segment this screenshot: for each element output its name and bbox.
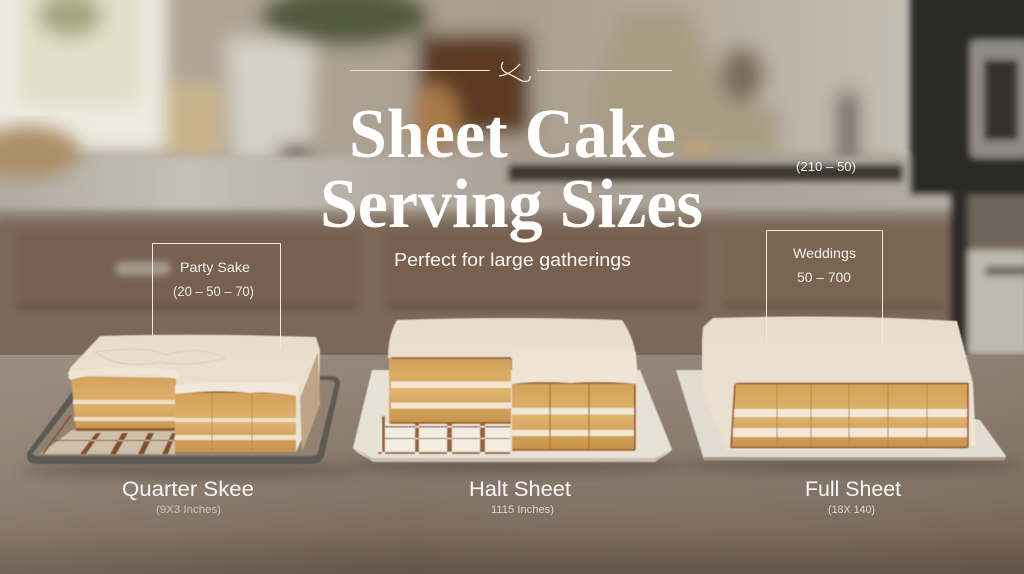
label: full sheet: (18X 140) (828, 504, 875, 516)
grid sheet (380, 423, 510, 454)
crust (731, 383, 968, 448)
label: half sheet: Halt Sheet (469, 478, 571, 501)
frosting swirl (95, 349, 225, 364)
callout: weddings text: Weddings (793, 245, 856, 261)
top ornament (350, 62, 672, 81)
grooves (777, 383, 927, 448)
board (353, 370, 672, 461)
frosting body (702, 317, 976, 450)
frosting top (68, 335, 320, 452)
top serving range: (210 – 50) (796, 159, 856, 174)
title: Sheet Cake (349, 96, 676, 173)
board front edge (355, 449, 672, 462)
label: half sheet: 1115 Inches) (491, 504, 554, 516)
right section sponge (175, 393, 296, 452)
right section fillings (512, 408, 635, 436)
wooden table surface (0, 355, 1024, 574)
subtitle: Perfect for large gatherings (394, 250, 631, 270)
right section grooves (212, 393, 252, 452)
label: full sheet (805, 478, 901, 516)
board edge (704, 457, 1005, 460)
right crust (512, 383, 635, 450)
tray inner (33, 380, 335, 456)
left section fillings (391, 382, 511, 408)
grid lines (378, 416, 510, 454)
tray (27, 376, 340, 464)
callout: party size text (173, 259, 254, 299)
cake right side (300, 352, 320, 452)
right crust (175, 391, 296, 393)
cake: full sheet on cake board (676, 317, 1006, 460)
callout: party size text: Party Sake (180, 259, 250, 275)
left section sponge (389, 358, 511, 424)
rack bars (42, 415, 176, 454)
bracket: weddings callout (766, 230, 882, 343)
title (320, 96, 703, 243)
left section fillings (73, 400, 176, 421)
bracket: party size callout (152, 244, 280, 348)
left crust (391, 358, 511, 423)
callout: weddings text: 50 – 700 (797, 269, 851, 285)
wire rack (40, 430, 175, 454)
right section grooves (550, 384, 589, 450)
callout: weddings text (793, 245, 856, 285)
fillings (733, 409, 968, 437)
ornament flourish (499, 62, 530, 81)
front frosting lip right (175, 382, 297, 396)
frosting left side shading (702, 345, 734, 450)
label: full sheet: Full Sheet (805, 478, 901, 501)
right section sponge (512, 383, 635, 450)
left crust (76, 428, 176, 431)
front frosting lip left (68, 367, 178, 380)
front frosting lip (512, 352, 636, 384)
ornament rule left (350, 70, 490, 72)
cake: quarter sheet on metal tray (27, 335, 340, 464)
callout: party size text: (20 – 50 – 70) (173, 283, 254, 299)
left section sponge (71, 376, 176, 431)
right section fillings (175, 418, 296, 440)
cake: half sheet on white board (353, 318, 672, 462)
frosting top (388, 318, 639, 450)
label: half sheet (469, 478, 571, 516)
title: Serving Sizes (320, 166, 703, 243)
label: quarter sheet: Quarter Skee (122, 478, 254, 501)
board (676, 370, 1006, 460)
label: quarter sheet (122, 478, 254, 516)
ornament rule right (537, 70, 672, 72)
label: quarter sheet: (9X3 Inches) (156, 504, 221, 516)
sponge (731, 383, 968, 448)
